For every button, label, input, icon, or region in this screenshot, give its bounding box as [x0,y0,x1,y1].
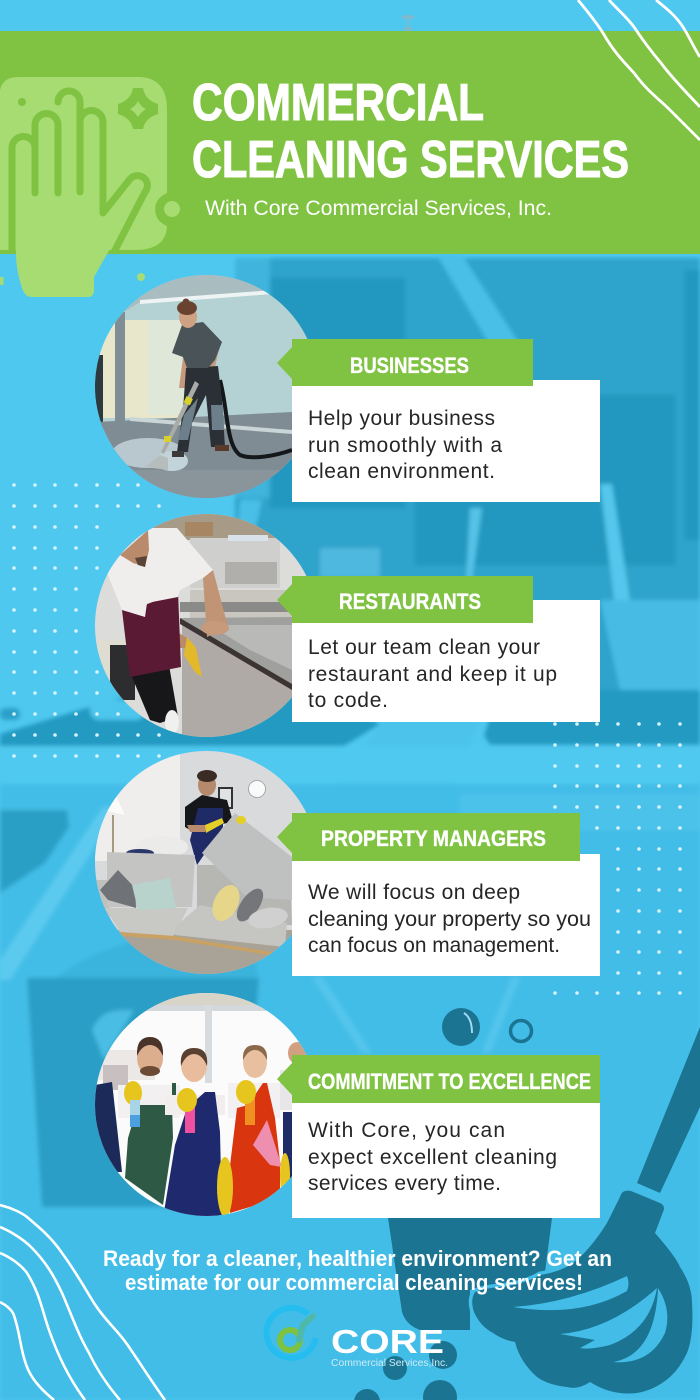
card [292,380,600,502]
banner [292,1055,600,1103]
body text: run smoothly with a [308,434,502,457]
body text [308,636,557,712]
photo: man cleaning sofa [95,751,320,976]
call to action [103,1246,612,1295]
man in green overall [118,1085,180,1118]
dot grid left [12,483,161,758]
body text: Let our team clean your [308,636,540,659]
bubble [164,201,180,217]
photo: chef wiping counter [95,514,320,739]
body text: expect excellent cleaning [308,1146,557,1169]
body text [308,1119,557,1195]
banner [292,339,533,386]
body text: Help your business [308,407,495,430]
icon: hand wiping sponge [0,77,180,297]
heading: COMMITMENT TO EXCELLENCE [308,1069,591,1094]
office photo backdrop [0,255,700,800]
card [292,854,600,976]
card [292,600,600,722]
call to action: estimate for our commercial cleaning services! [125,1270,583,1295]
logo tagline: Commercial Services,Inc. [331,1358,448,1369]
body text: We will focus on deep [308,881,520,904]
photo: carpet cleaning [95,275,320,500]
lower floor backdrop [0,784,700,1400]
dot grid right [553,722,682,995]
arrow tab [277,820,293,854]
woman in red apron [228,1083,280,1118]
sparkle [118,88,158,129]
body text [308,881,591,957]
body text: clean environment. [308,460,495,483]
logo [267,1308,448,1369]
photo: cleaning team [95,993,320,1218]
body text [308,407,502,483]
card [292,1100,600,1218]
body text: services every time. [308,1172,501,1195]
panel: property managers [95,751,600,976]
call to action: Ready for a cleaner, healthier environment? Get an [103,1246,612,1271]
title [192,74,629,189]
title: COMMERCIAL [192,74,484,132]
body text: restaurant and keep it up [308,663,557,686]
logo mark [267,1308,316,1358]
mop and bucket icon [354,1008,700,1400]
body text: can focus on management. [308,934,560,957]
wavy lines top right [578,0,700,140]
banner [292,813,580,861]
top ceiling fixture [401,15,415,31]
wavy lines bottom left [0,1205,165,1400]
logo wordmark: CORE [331,1323,444,1360]
arrow tab [277,1062,293,1096]
banner [292,576,533,623]
heading: PROPERTY MANAGERS [321,826,546,851]
body text: With Core, you can [308,1119,505,1142]
body text: cleaning your property so you [308,908,591,931]
heading: RESTAURANTS [339,589,481,614]
body text: to code. [308,689,388,712]
woman in blue apron [165,1095,225,1115]
arrow tab [277,346,293,380]
panel: commitment to excellence [95,993,600,1218]
panel: restaurants [95,514,600,739]
subtitle: With Core Commercial Services, Inc. [205,197,552,220]
header band [0,0,700,297]
arrow tab [277,583,293,617]
panel: businesses [95,275,600,502]
right person [288,1042,306,1064]
heading: BUSINESSES [350,353,469,378]
